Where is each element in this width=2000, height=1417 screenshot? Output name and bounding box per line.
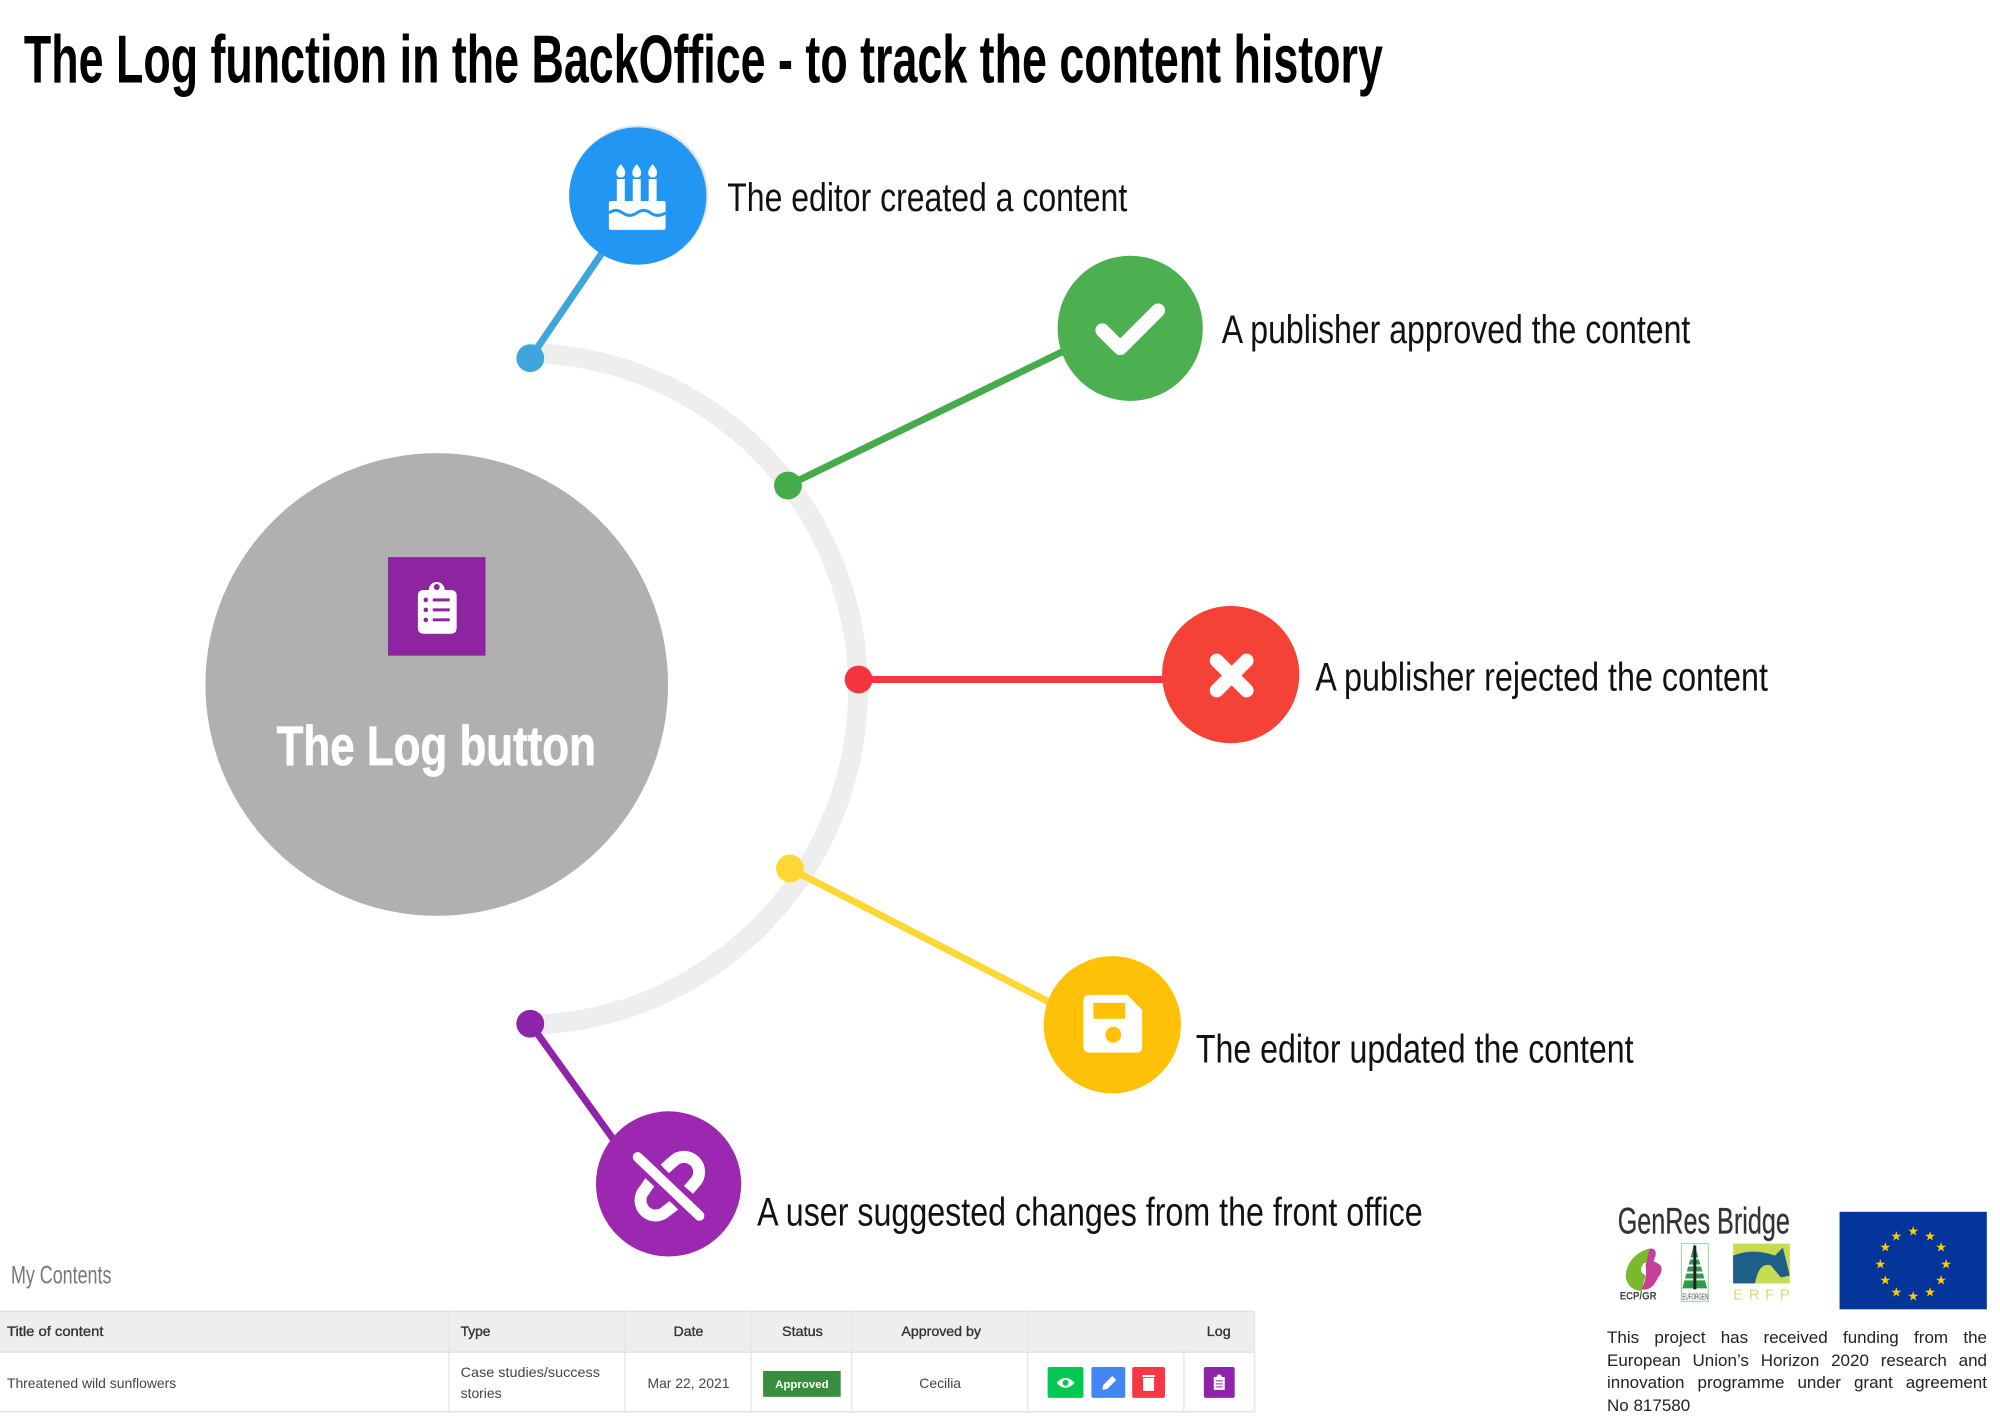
- EU flag: ★: [1935, 1272, 1947, 1287]
- EU flag: ★: [1875, 1256, 1886, 1271]
- label: The editor updated the content: [1196, 1028, 1634, 1072]
- event: content updated: [776, 855, 1634, 1093]
- logo: ERFP: [1733, 1244, 1790, 1303]
- logo: ERFP: ERFP: [1733, 1286, 1790, 1303]
- central circle: the Log button: [205, 453, 668, 916]
- table row: Case studies/success: [461, 1364, 600, 1380]
- table header: Status: [782, 1323, 823, 1339]
- label: The editor created a content: [727, 176, 1127, 220]
- delete button: [1132, 1367, 1165, 1398]
- table header: Title of content: [7, 1323, 104, 1339]
- logo: ECP/GR: ECP/GR: [1620, 1290, 1657, 1302]
- icon: check mark: [1102, 310, 1158, 348]
- status badge: [763, 1371, 841, 1397]
- table row: Mar 22, 2021: [647, 1375, 730, 1391]
- logo: EUFORGEN: [1681, 1244, 1708, 1301]
- timeline arc: [530, 353, 858, 1025]
- view button: [1048, 1367, 1083, 1398]
- log button: [1204, 1367, 1235, 1398]
- table header: Approved by: [901, 1323, 981, 1339]
- EU flag: ★: [1880, 1240, 1891, 1255]
- label: A publisher approved the content: [1222, 308, 1690, 352]
- icon: unlinked chain: [638, 1157, 700, 1217]
- event: front-office suggestion: [516, 1010, 1423, 1257]
- EU flag: ★: [1907, 1224, 1919, 1239]
- EU flag: ★: [1940, 1256, 1952, 1271]
- EU flag: ★: [1924, 1229, 1936, 1244]
- EU flag: ★: [1890, 1229, 1902, 1244]
- table row: Threatened wild sunflowers: [7, 1375, 176, 1391]
- EU flag: ★: [1907, 1288, 1919, 1303]
- table row: stories: [461, 1385, 502, 1401]
- label: A user suggested changes from the front office: [757, 1191, 1423, 1235]
- heading: My Contents: My Contents: [11, 1261, 111, 1289]
- contents table: [0, 1311, 1255, 1413]
- event: content approved: [774, 256, 1690, 499]
- table header: Date: [674, 1323, 704, 1339]
- edit button: [1091, 1367, 1125, 1398]
- funding statement: No 817580: [1607, 1396, 1690, 1414]
- label: A publisher rejected the content: [1315, 655, 1768, 699]
- EU flag: ★: [1924, 1284, 1936, 1299]
- event: content rejected: [845, 606, 1768, 743]
- EU flag: ★: [1880, 1272, 1891, 1287]
- table header: Type: [461, 1323, 491, 1339]
- event: content created: [516, 125, 1127, 372]
- icon: birthday cake: [609, 164, 666, 230]
- logo: EUFORGEN: EUFORGEN: [1682, 1292, 1708, 1301]
- table header: Log: [1207, 1323, 1231, 1339]
- EU flag: [1840, 1212, 1987, 1309]
- table header: [7, 1323, 1231, 1339]
- logo: ECP/GR: [1620, 1249, 1662, 1302]
- funding statement: innovation programme under grant agreement: [1607, 1373, 1987, 1392]
- icon: floppy disk: [1083, 995, 1142, 1053]
- icon: cross: [1217, 661, 1247, 690]
- GenRes Bridge logo: [1618, 1201, 1790, 1303]
- status badge: Approved: [775, 1379, 829, 1391]
- central label: The Log button: [277, 715, 596, 777]
- funding statement: This project has received funding from the: [1607, 1328, 1987, 1347]
- table row: Cecilia: [919, 1375, 961, 1391]
- EU flag: ★: [1890, 1284, 1902, 1299]
- table row: [7, 1364, 961, 1401]
- icon: log clipboard: [388, 557, 486, 656]
- funding statement: European Union’s Horizon 2020 research and: [1607, 1350, 1987, 1370]
- funding statement: [1607, 1328, 1987, 1414]
- EU flag: ★: [1935, 1240, 1947, 1255]
- GenRes Bridge logo: GenRes Bridge: [1618, 1201, 1790, 1242]
